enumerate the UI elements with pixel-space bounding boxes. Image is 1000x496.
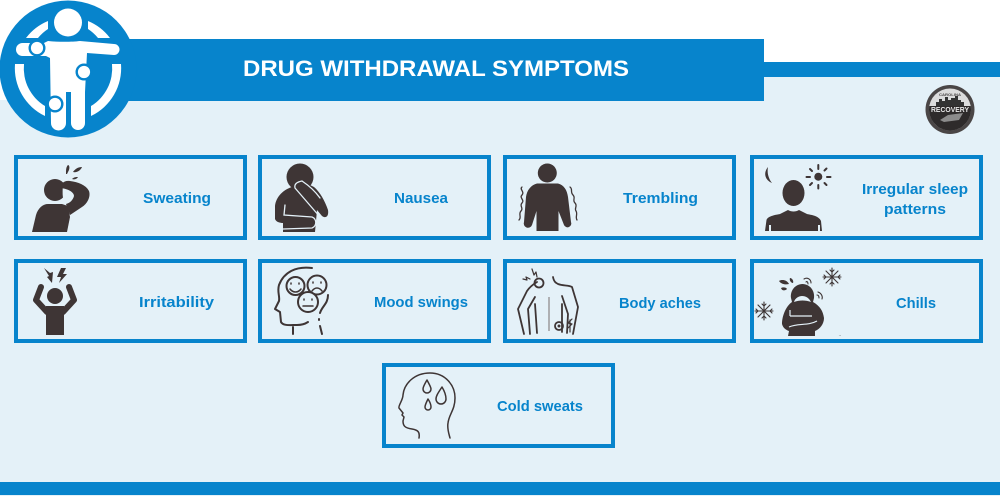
panel: Chills [752, 261, 981, 341]
header right strip [760, 62, 1000, 77]
panel: Cold sweats [384, 365, 613, 446]
title banner [120, 39, 764, 101]
panel: Body aches [505, 261, 734, 341]
label: Mood swings [374, 294, 468, 311]
panel: Trembling [505, 157, 734, 238]
panel: Irregular sleep patterns [752, 157, 981, 238]
icon: trembling person [519, 164, 577, 231]
label: Cold sweats [497, 398, 583, 415]
label: Nausea [394, 190, 449, 207]
icon: Carolina Recovery logo: CAROLINA [939, 92, 961, 97]
footer bar [0, 482, 1000, 495]
label: Sweating [143, 190, 211, 207]
icon: head with sweat drops [399, 373, 455, 438]
icon: shivering person with snowflakes: ... [839, 333, 841, 337]
label: Chills [896, 295, 936, 312]
icon: head with mood faces [275, 268, 328, 334]
label: Irregular sleep [862, 181, 968, 198]
icon: shivering person with snowflakes [755, 268, 841, 337]
icon: person covering mouth [275, 164, 328, 232]
label: Irritability [139, 294, 215, 311]
icon: Carolina Recovery logo: RECOVERY [931, 107, 969, 114]
icon: back with pain points [518, 269, 578, 334]
label [862, 181, 968, 218]
label: Trembling [623, 190, 698, 207]
label: Body aches [619, 295, 701, 312]
panel: Irritability [16, 261, 245, 341]
panel: Nausea [260, 157, 489, 238]
icon: person with moon and sun [765, 165, 830, 231]
panel: Sweating [16, 157, 245, 238]
title: DRUG WITHDRAWAL SYMPTOMS [243, 56, 629, 81]
panel: Mood swings [260, 261, 489, 341]
icon: body with pain points [0, 0, 136, 138]
icon: person with hands on head and lightning [36, 268, 74, 335]
icon: person wiping brow [32, 165, 90, 232]
icon: Carolina Recovery logo [926, 85, 974, 134]
label: patterns [884, 201, 946, 218]
